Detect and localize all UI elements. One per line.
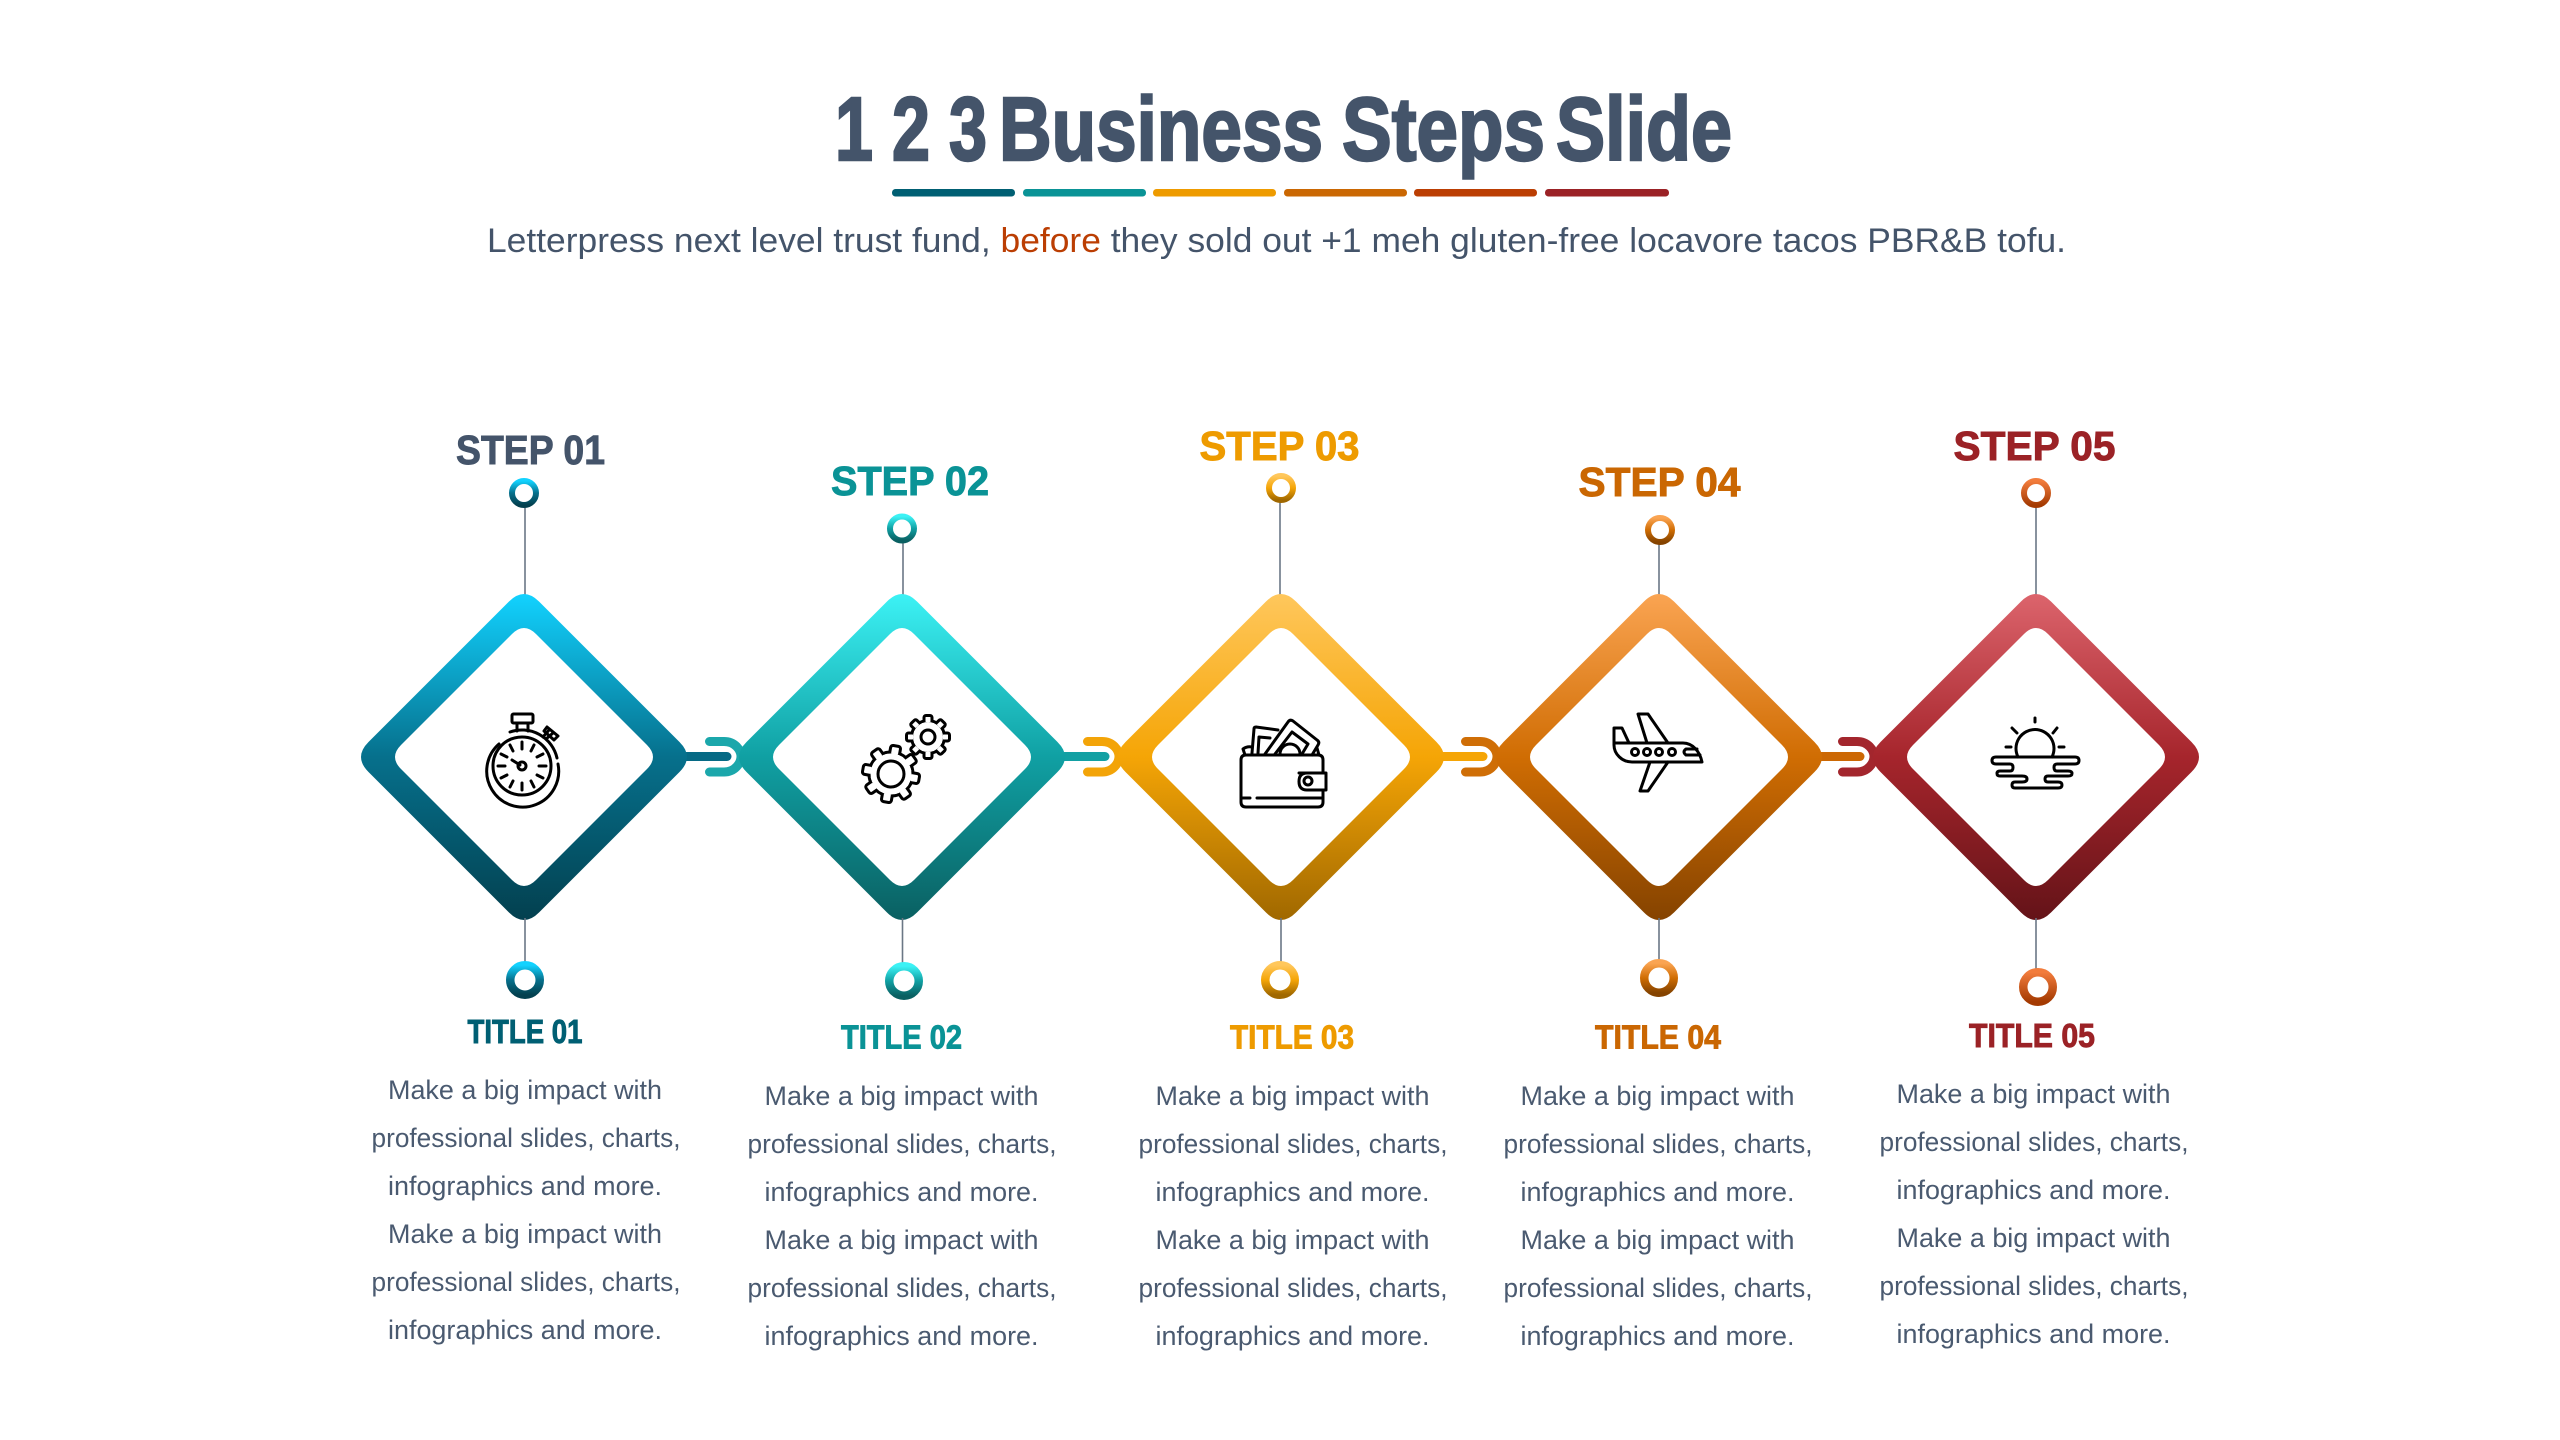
body text 02: Make a big impact with (764, 1225, 1038, 1255)
bottom pin (1644, 918, 1674, 993)
title: Business (999, 80, 1323, 180)
body text 02: professional slides, charts, (748, 1129, 1056, 1159)
title (835, 80, 1732, 180)
title underline colour bars (892, 189, 1669, 196)
body text 03: infographics and more. (1156, 1321, 1430, 1351)
diamond frame (739, 594, 1065, 920)
diamond frame (1118, 594, 1444, 920)
panel: step 03 (1118, 423, 1448, 1351)
body text 05: Make a big impact with (1896, 1079, 2170, 1109)
top pin (1269, 476, 1293, 595)
icon: stopwatch (487, 714, 559, 807)
icon: wallet with banknotes (1241, 720, 1326, 807)
step 01 label: STEP 01 (456, 427, 605, 473)
body text 04: Make a big impact with (1520, 1225, 1794, 1255)
body text 05: professional slides, charts, (1880, 1271, 2188, 1301)
title: 1 2 3 (835, 80, 987, 180)
body text 05 (1880, 1079, 2188, 1349)
icon: sunset over clouds (1992, 718, 2079, 788)
body text 05: infographics and more. (1896, 1175, 2170, 1205)
top pin (2024, 481, 2048, 595)
body text 01: Make a big impact with (388, 1219, 662, 1249)
body text 05: infographics and more. (1896, 1319, 2170, 1349)
title: Slide (1556, 80, 1732, 180)
bottom pin (2023, 918, 2053, 1002)
body text 01: infographics and more. (388, 1315, 662, 1345)
diamond frame (1496, 594, 1822, 920)
body text 02: Make a big impact with (764, 1081, 1038, 1111)
bottom pin (889, 918, 919, 996)
diamond frame (361, 594, 687, 920)
title 02: TITLE 02 (841, 1018, 962, 1056)
body text 03: Make a big impact with (1156, 1081, 1430, 1111)
panel: step 01 (361, 427, 687, 1345)
body text 02: infographics and more. (764, 1177, 1038, 1207)
panel: step 02 (739, 458, 1065, 1351)
diamond frame (1873, 594, 2199, 920)
body text 01: professional slides, charts, (372, 1123, 680, 1153)
connector: step 4 to 5 (1818, 742, 1874, 772)
body text 05: Make a big impact with (1896, 1223, 2170, 1253)
connector: step 1 to 2 (685, 742, 741, 772)
step 03 label: STEP 03 (1200, 423, 1360, 469)
body text 04: infographics and more. (1520, 1177, 1794, 1207)
subtitle: Letterpress next level trust fund, before they sold out +1 meh gluten-free locavore tacos PBR&B tofu. (487, 222, 2066, 260)
top pin (890, 516, 914, 595)
body text 01: Make a big impact with (388, 1075, 662, 1105)
body text 03: professional slides, charts, (1138, 1273, 1448, 1303)
title 05: TITLE 05 (1969, 1017, 2095, 1054)
connector: step 3 to 4 (1441, 742, 1497, 772)
step 04 label: STEP 04 (1578, 459, 1741, 505)
body text 02 (748, 1081, 1056, 1351)
connector: step 2 to 3 (1063, 742, 1119, 772)
step 05 label: STEP 05 (1954, 423, 2116, 469)
title 01: TITLE 01 (468, 1013, 582, 1050)
body text 02: professional slides, charts, (748, 1273, 1056, 1303)
icon: gears (862, 716, 950, 803)
title 04: TITLE 04 (1595, 1018, 1722, 1056)
top pin (512, 481, 536, 595)
body text 01 (372, 1075, 680, 1345)
body text 04: professional slides, charts, (1504, 1129, 1812, 1159)
body text 04: professional slides, charts, (1504, 1273, 1812, 1303)
body text 01: infographics and more. (388, 1171, 662, 1201)
body text 02: infographics and more. (764, 1321, 1038, 1351)
body text 04: Make a big impact with (1520, 1081, 1794, 1111)
title: Steps (1342, 80, 1545, 180)
bottom pin (1265, 918, 1295, 995)
body text 03 (1138, 1081, 1448, 1351)
top pin (1648, 518, 1672, 595)
title 03: TITLE 03 (1230, 1018, 1354, 1056)
body text 03: Make a big impact with (1156, 1225, 1430, 1255)
body text 01: professional slides, charts, (372, 1267, 680, 1297)
icon: airplane (1614, 714, 1702, 791)
bottom pin (510, 918, 540, 995)
panel: step 05 (1873, 423, 2199, 1349)
body text 03: infographics and more. (1156, 1177, 1430, 1207)
body text 03: professional slides, charts, (1138, 1129, 1448, 1159)
body text 04: infographics and more. (1520, 1321, 1794, 1351)
body text 05: professional slides, charts, (1880, 1127, 2188, 1157)
body text 04 (1504, 1081, 1812, 1351)
step 02 label: STEP 02 (831, 458, 989, 504)
panel: step 04 (1496, 459, 1822, 1351)
